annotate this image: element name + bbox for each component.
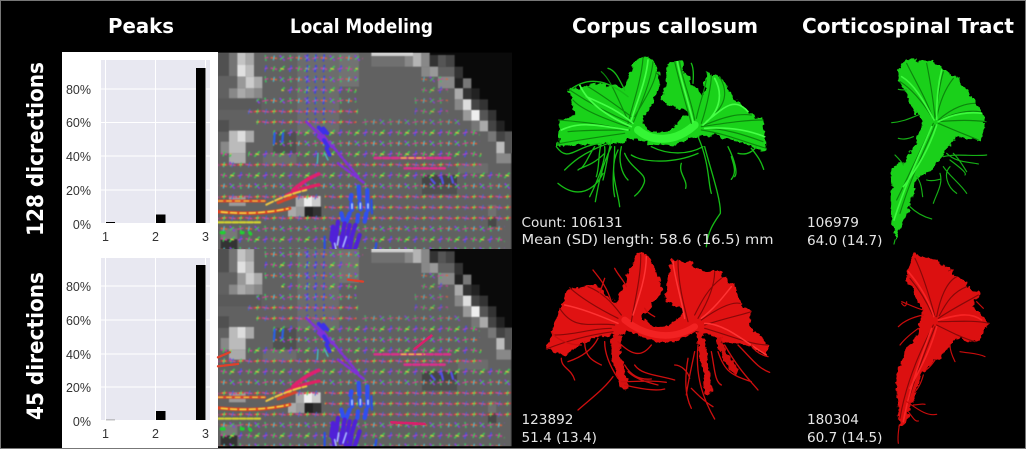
x axis labels: 3 [202,230,209,244]
panel: local modeling 128 directions [215,49,515,253]
stats: corpus callosum 45 directions: 51.4 (13.4) [522,430,597,446]
y axis labels: 60% [66,314,91,328]
stats: corticospinal tract 45 directions [807,412,882,446]
bar: 3 peaks [196,265,206,420]
bar: 2 peaks [156,411,166,420]
bar chart: peaks 45 directions [66,258,210,441]
bar: 1 peak [106,222,115,223]
x axis labels: 3 [202,427,209,441]
bar: 2 peaks [156,214,166,223]
panel: local modeling 45 directions [215,246,515,449]
y axis labels: 20% [66,184,91,198]
stats: corticospinal tract 128 directions: 64.0 (14.7) [807,233,882,249]
y axis labels: 0% [73,218,91,232]
y axis labels: 0% [73,415,91,429]
x axis labels: 1 [102,230,109,244]
glyph field [265,53,363,63]
y axis labels: 60% [66,116,91,130]
y axis labels [66,280,91,429]
y axis labels: 80% [66,280,91,294]
y axis labels: 40% [66,348,91,362]
x axis labels [102,230,209,244]
stats: corticospinal tract 45 directions: 180304 [807,412,859,428]
stats: corpus callosum 128 directions: Mean (SD) length: 58.6 (16.5) mm [522,232,774,248]
row label: 128 dicrections: 128 dicrections [24,62,49,236]
stats: corpus callosum 45 directions: 123892 [522,412,573,428]
y axis labels [66,83,91,232]
tractogram: corpus callosum 128 directions (green) [556,57,766,247]
panel: peaks background [62,52,218,448]
stats: corticospinal tract 45 directions: 60.7 (14.5) [807,430,882,446]
x axis labels: 2 [152,427,159,441]
stats: corticospinal tract 128 directions: 106979 [807,215,859,231]
x axis labels [102,427,209,441]
bar: 1 peak [106,418,115,421]
bar chart: peaks 128 directions [66,60,210,244]
stats: corpus callosum 128 directions: Count: 106131 [522,215,623,231]
fibre crossing: coloured ellipsoids [218,122,453,250]
x axis labels: 1 [102,427,109,441]
stats: corpus callosum 45 directions [522,412,597,446]
stats: corticospinal tract 128 directions [807,215,882,249]
y axis labels: 40% [66,150,91,164]
tractogram: corticospinal tract 45 directions (red) [896,254,990,443]
y axis labels: 20% [66,381,91,395]
bar: 3 peaks [196,68,206,223]
glyph differences in lower panel [218,280,431,424]
x axis labels: 2 [152,230,159,244]
stats: corpus callosum 128 directions [522,215,774,248]
tractogram: corticospinal tract 128 directions (green) [892,58,987,244]
tractogram: corpus callosum 45 directions (red) [546,253,770,419]
column heading: Peaks: Peaks [108,14,174,38]
column heading: Local Modeling: Local Modeling [290,15,433,38]
column heading: Corpus callosum: Corpus callosum [572,14,758,38]
column heading: Corticospinal Tract: Corticospinal Tract [802,14,1014,38]
y axis labels: 80% [66,83,91,97]
row label: 45 directions: 45 directions [24,272,49,420]
